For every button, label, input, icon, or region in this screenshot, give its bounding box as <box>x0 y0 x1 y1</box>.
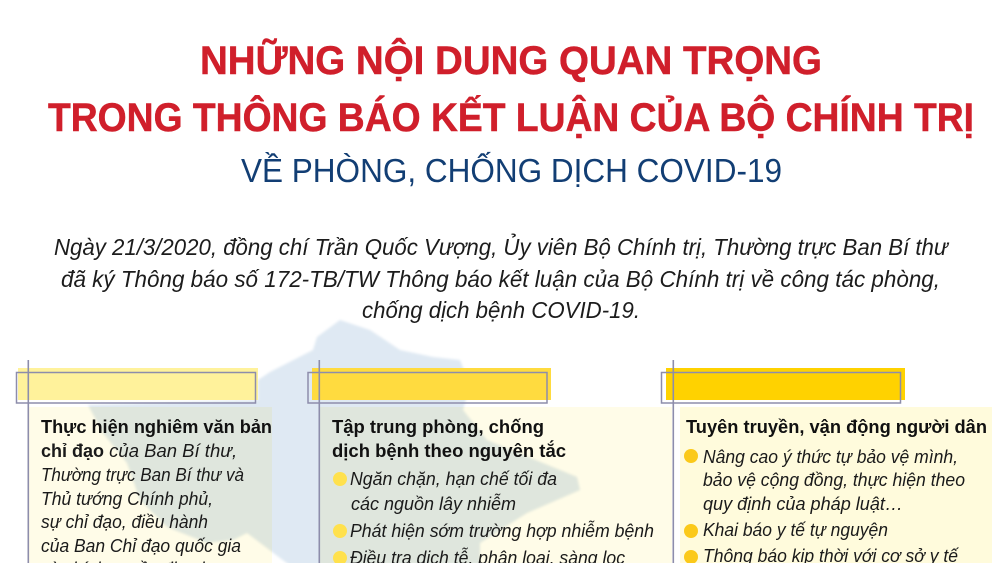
intro paragraph <box>54 232 949 323</box>
panel backgrounds <box>28 407 992 563</box>
column 2 bullets: các nguồn lây nhiễm <box>351 493 516 514</box>
column 1 text: của Ban Chỉ đạo quốc gia <box>41 535 241 556</box>
column 2 header bar <box>308 360 551 563</box>
column 1 text: Thủ tướng Chính phủ, <box>41 488 213 509</box>
subtitle: VỀ PHÒNG, CHỐNG DỊCH COVID-19 <box>241 151 782 190</box>
column 2 heading: Tập trung phòng, chống <box>332 417 544 437</box>
column 2 bullets: Ngăn chặn, hạn chế tối đa <box>350 468 557 489</box>
column 3 bullets: bảo vệ cộng đồng, thực hiện theo <box>703 469 965 490</box>
intro paragraph: Ngày 21/3/2020, đồng chí Trần Quốc Vượng, Ủy viên Bộ Chính trị, Thường trực Ban Bí thư <box>54 232 949 260</box>
column 3 heading: Tuyên truyền, vận động người dân <box>686 417 987 437</box>
column 3 bullets: quy định của pháp luật… <box>703 493 903 514</box>
column 3 bullets <box>684 446 965 563</box>
column 1 text: chỉ đạo của Ban Bí thư, <box>41 440 237 461</box>
column 2 heading: dịch bệnh theo nguyên tắc <box>332 440 566 461</box>
column 3 header bar <box>662 360 905 563</box>
column 2 heading <box>332 417 566 461</box>
column 1 text: Thường trực Ban Bí thư và <box>41 464 244 485</box>
column 1 header bar <box>16 360 258 563</box>
column 1 text <box>41 417 272 563</box>
panel: column 1 <box>16 360 272 563</box>
column 2 bullets: Phát hiện sớm trường hợp nhiễm bệnh <box>350 520 654 541</box>
title <box>48 37 974 140</box>
panel: column 2 <box>308 360 654 563</box>
column 1 text: Thực hiện nghiêm văn bản <box>41 417 272 437</box>
intro paragraph: đã ký Thông báo số 172-TB/TW Thông báo kết luận của Bộ Chính trị về công tác phòng, <box>61 266 940 292</box>
column 2 bullets <box>333 468 654 563</box>
title: NHỮNG NỘI DUNG QUAN TRỌNG <box>200 37 822 83</box>
background map of Vietnam <box>88 320 580 563</box>
column 3 bullets: Nâng cao ý thức tự bảo vệ mình, <box>703 446 958 467</box>
column 3 bullets: Khai báo y tế tự nguyện <box>703 519 888 540</box>
intro paragraph: chống dịch bệnh COVID-19. <box>362 297 640 323</box>
column 1 text: sự chỉ đạo, điều hành <box>41 511 208 532</box>
panel: column 3 <box>662 360 987 563</box>
